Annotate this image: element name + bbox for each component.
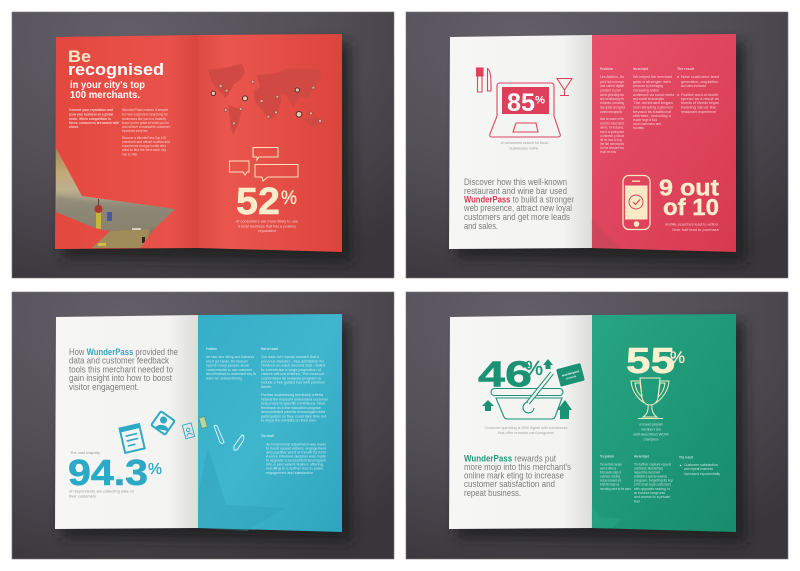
caption: 9 out of 10 bbox=[665, 222, 719, 232]
text block: problem, help, result columns: local customers and bbox=[633, 122, 661, 126]
text block: problem, help, result columns: into a permanent feature offering, bbox=[266, 462, 324, 466]
text block: intro columns: grow your business on a global bbox=[69, 112, 113, 116]
stat: 9 out of 10 bbox=[659, 174, 719, 220]
text block: restaurant headline: and sales. bbox=[464, 221, 498, 231]
text block: problem, help, result columns: trust on this bbox=[600, 150, 616, 154]
stat: 52% bbox=[236, 181, 297, 223]
text block: problem, help, result columns: presence by leveraging bbox=[633, 84, 663, 88]
text block: problem, help, result columns: and access to a private bbox=[634, 495, 670, 499]
caption: 46%: that offer rewards card programs bbox=[498, 431, 554, 435]
stat: 46%: % bbox=[525, 358, 543, 380]
stat: 52%: 52 bbox=[236, 181, 280, 223]
text block: problem, help, result columns: about feedback to understand why its bbox=[206, 372, 256, 376]
text block: rewards headline bbox=[464, 454, 572, 498]
icon: rewards card bbox=[556, 363, 585, 387]
icons: up arrows bbox=[482, 359, 572, 419]
text block: intro columns: has to offer. bbox=[122, 152, 138, 156]
text block: problem, help, result columns: Les Ateliers, It's bbox=[600, 75, 624, 79]
text block: rewards headline: online mark eting to increase bbox=[464, 470, 564, 480]
icon: shopping basket bbox=[491, 373, 563, 419]
text block: problem, help, result columns: 10% most loyal customers bbox=[634, 482, 671, 486]
text block: problem, help, result columns: clientele, including a bbox=[633, 114, 671, 118]
text block: problem, help, result columns bbox=[600, 67, 719, 154]
icon: rewards card: rewards bbox=[565, 374, 577, 381]
text block: intro columns: experiences every time. bbox=[122, 129, 148, 133]
text block: problem, help, result columns bbox=[600, 454, 720, 504]
heading: be recognised: Be bbox=[68, 47, 91, 66]
text block: problem, help, result columns: owner is offered a bbox=[600, 466, 616, 470]
stat: 55%: 55 bbox=[626, 340, 675, 381]
text block: problem, help, result columns: the flat merchants bbox=[600, 142, 624, 146]
caption: 94.3% bbox=[69, 490, 134, 498]
text: the vast majority: The vast majority bbox=[70, 451, 100, 455]
text block: restaurant headline: WunderPass to build a stronger bbox=[464, 194, 574, 204]
text block: problem, help, result columns: To further capture repeat bbox=[634, 462, 671, 466]
text block: intro columns: WunderPass makes it simple bbox=[122, 108, 168, 112]
text block: problem, help, result columns: Also be aware of the bbox=[600, 117, 624, 121]
stat: 9 out of 10: 9 out bbox=[659, 174, 719, 200]
text block: engagement headline: tools this merchant needed to bbox=[69, 364, 173, 374]
text block: problem, help, result columns: include a free guided tour with premium bbox=[261, 380, 325, 384]
icon: laptop with 85%: 85 bbox=[507, 89, 535, 117]
text block: problem, help, result columns: The merchant began bbox=[633, 101, 673, 105]
caption: 55%: champions bbox=[644, 438, 659, 442]
text block: problem, help, result columns bbox=[206, 347, 329, 475]
text block: problem, help, result columns: third-country origin of bbox=[600, 470, 621, 474]
text block: problem, help, result columns: and sales increased bbox=[681, 84, 706, 88]
text block: problem, help, result columns: volumes, including bbox=[600, 101, 624, 105]
caption: 9 out of 10: mobile searches lead to action. bbox=[665, 222, 719, 226]
text block: problem, help, result columns: Let the WunderPass bbox=[600, 146, 624, 150]
stat: 94.3%: % bbox=[148, 461, 162, 478]
text block: engagement headline: gain insight into how to boost bbox=[69, 373, 172, 383]
text block: problem, help, result columns: helped the merchant bbox=[634, 470, 660, 474]
text block: problem, help, result columns: and varied digital bbox=[600, 84, 624, 88]
text block: problem, help, result columns: why it got harder, the museum bbox=[206, 360, 248, 364]
text block: problem, help, result columns: Problem bbox=[600, 67, 613, 71]
text block: problem, help, result columns: customers, WunderPass bbox=[634, 466, 663, 470]
caption: 94.3%: their customers bbox=[69, 494, 96, 498]
text block: problem, help, result columns: of internet, product bbox=[600, 134, 624, 138]
text block: problem, help, result columns: participation so they could take time out bbox=[261, 414, 326, 418]
text block: intro columns: experience-hungry locals who bbox=[122, 144, 166, 148]
text block: problem, help, result columns: How we helped bbox=[633, 67, 648, 71]
text block: intro columns: merchant and attract tourists and bbox=[122, 140, 170, 144]
map: world markers bbox=[208, 63, 323, 135]
text block: problem, help, result columns: Positive word-of-mouth bbox=[681, 93, 718, 97]
text block: problem, help, result columns: generation, acquisition bbox=[681, 80, 718, 84]
text block: problem, help, result columns: visitor are underperforming bbox=[206, 376, 242, 380]
text block: problem, help, result columns: Our data-rich reports showed that a bbox=[261, 355, 319, 359]
text block: problem, help, result columns: tickets. bbox=[261, 385, 272, 389]
caption: 85%: of consumers search for local bbox=[500, 141, 548, 145]
text block: rewards headline: more mojo into this merchant's bbox=[464, 462, 572, 472]
text block: problem, help, result columns: program, targeting its top bbox=[634, 478, 673, 482]
text block: intro columns: Convert your reputation and bbox=[69, 108, 113, 112]
icon: speech bubbles bbox=[230, 148, 298, 181]
text block: restaurant headline: customers and get more leads bbox=[464, 212, 571, 222]
text block: problem, help, result columns: beyond its traditional bbox=[633, 110, 671, 114]
text block: intro columns bbox=[69, 108, 171, 156]
text block: problem, help, result columns: off on how to buy bbox=[600, 138, 622, 142]
text block: problem, help, result columns: owner, for instance, bbox=[600, 126, 624, 130]
text block: engagement headline: How WunderPass provided the bbox=[69, 347, 178, 357]
icon: laptop with 85% bbox=[490, 83, 560, 137]
stat: 55%: % bbox=[670, 348, 685, 367]
icon: laptop with 85%: % bbox=[535, 94, 545, 106]
caption: 52%: reputation bbox=[258, 229, 276, 233]
text block: intro columns: businesses like yours to instantly bbox=[122, 117, 166, 121]
text block: engagement headline: visitor engagement. bbox=[69, 382, 139, 392]
panel: green spread bbox=[406, 292, 788, 559]
text block: engagement headline: data and customer feedback bbox=[69, 356, 170, 366]
text block: problem, help, result columns: soon attracting customers bbox=[633, 106, 673, 110]
text block: restaurant headline bbox=[463, 177, 574, 231]
text block: problem, help, result columns: restaurant experience bbox=[681, 110, 716, 114]
text block: problem, help, result columns: and repeat business bbox=[684, 467, 713, 471]
text block: rewards headline: WunderPass rewards put bbox=[464, 454, 557, 464]
stat: 46%: 46 bbox=[478, 354, 532, 394]
text block: intro columns: fierce, consumers are awash with bbox=[69, 121, 119, 125]
text block: problem, help, result columns: gain a stronger web bbox=[633, 80, 671, 84]
text block: intro columns: scale. When competition is bbox=[69, 117, 111, 121]
caption: 55%: self-described WOM bbox=[634, 432, 669, 436]
text block: problem, help, result columns: Further customising feedback criteria bbox=[261, 393, 323, 397]
text block: problem, help, result columns: we saw new hiding and business bbox=[206, 355, 254, 359]
icon: contact card bbox=[150, 411, 176, 436]
text block: problem, help, result columns: access generating new bbox=[600, 93, 624, 97]
text block: problem, help, result columns: to boost repeat visitors, engagement bbox=[266, 446, 326, 450]
text block: rewards headline: repeat business. bbox=[464, 488, 521, 498]
panel: pink spread bbox=[406, 12, 788, 278]
text block: problem, help, result columns: to upgrade a successful trial program bbox=[266, 458, 326, 462]
text block: intro columns: Become a WunderPass Top 100 bbox=[122, 136, 166, 140]
icon: phone with check bbox=[623, 176, 650, 230]
text block: problem, help, result columns: and positive word of mouth by 61% bbox=[266, 450, 326, 454]
text block: problem, help, result columns: feedback on a live education program bbox=[261, 406, 321, 410]
icon: fork, knife and glass bbox=[476, 68, 572, 96]
icon: form bbox=[118, 423, 146, 454]
text block: problem, help, result columns: The merchant manager bbox=[600, 462, 622, 466]
text block: problem, help, result columns: even in an growing base bbox=[600, 130, 624, 134]
caption: 46%: Customer spending is 46% higher with businesses bbox=[484, 426, 568, 430]
text block: problem, help, result columns: broader range of local bbox=[633, 118, 657, 122]
shape: star watermark bbox=[198, 447, 285, 531]
caption: 52%: a local business that has a positive bbox=[238, 224, 296, 228]
text block: problem, help, result columns: previous sweater - free admission for bbox=[261, 360, 325, 364]
caption: 9 out of 10: Over half lead to purchase bbox=[672, 228, 719, 232]
text block: problem, help, result columns: visitors without children. The museum bbox=[261, 372, 324, 376]
text block: problem, help, result columns: customers, including bbox=[600, 474, 620, 478]
caption: 52%: of consumers are more likely to use bbox=[236, 220, 298, 224]
icon: trophy bbox=[631, 378, 669, 418]
caption: 52% bbox=[236, 220, 298, 233]
text block: problem, help, result columns: engagement and satisfaction bbox=[266, 471, 313, 475]
text block: problem, help, result columns: an exclusive lounge area bbox=[634, 491, 665, 495]
text block: problem, help, result columns: The result bbox=[677, 67, 695, 71]
text block: problem, help, result columns: hotels who begin out bbox=[600, 482, 619, 486]
text block: problem, help, result columns: An incremental adjustment was made bbox=[266, 442, 326, 446]
caption: 55%: members are bbox=[641, 428, 661, 432]
text block: restaurant headline: web presence, attract new loyal bbox=[463, 203, 572, 213]
text block: problem, help, result columns: children on each second visit - failed bbox=[261, 364, 325, 368]
text block: problem, help, result columns: spread as a result as bbox=[681, 97, 719, 101]
icon: small contact card bbox=[182, 423, 195, 439]
panel: red spread bbox=[12, 12, 394, 278]
text block: problem, help, result columns: Customer satisfaction bbox=[684, 463, 718, 467]
stat: 94.3%: 94.3 bbox=[68, 452, 148, 493]
heading: be recognised: 100 merchants. bbox=[70, 90, 140, 101]
text block: intro columns: choice. bbox=[69, 125, 79, 129]
text block: problem, help, result columns: recruiting come to the plans bbox=[600, 487, 631, 491]
text block: problem, help, result columns: present to pair bbox=[600, 88, 622, 92]
text block: problem, help, result columns: local joy restaurants and bbox=[600, 478, 621, 482]
text block: problem, help, result columns: customised its rewards program to bbox=[261, 376, 321, 380]
text block: problem, help, result columns: how uptake and typical bbox=[600, 106, 625, 110]
text block: problem, help, result columns: and mobile technologies bbox=[633, 97, 664, 101]
text block: problem, help, result columns: tourists bbox=[633, 126, 644, 130]
text block: rewards headline: customer satisfaction and bbox=[464, 479, 555, 489]
heading: be recognised bbox=[68, 47, 164, 101]
photo: city skyline bbox=[56, 148, 180, 250]
text block: problem, help, result columns: hearing about the bbox=[681, 106, 716, 110]
stat: 9 out of 10: of 10 bbox=[663, 194, 719, 220]
text block: intro columns: for new customers searching for bbox=[122, 112, 169, 116]
heading: be recognised: in your city's top bbox=[70, 80, 145, 91]
panel: teal spread bbox=[12, 292, 394, 559]
stat: 46% bbox=[478, 354, 543, 394]
text block: problem, help, result columns: bar bbox=[634, 500, 641, 504]
text block: problem, help, result columns: The problem bbox=[600, 454, 614, 458]
text block: problem, help, result columns: The result bbox=[679, 456, 694, 460]
text block: problem, help, result columns: increased exponentially bbox=[684, 472, 720, 476]
text block: engagement headline bbox=[69, 347, 178, 392]
icon: rewards card: wunderpass bbox=[560, 369, 580, 378]
text block: problem, help, result columns: to incentivise a large proportion of bbox=[261, 368, 321, 372]
text block: problem, help, result columns: A more informed decision was made bbox=[266, 454, 326, 458]
text block: problem, help, result columns: Problem bbox=[206, 347, 217, 351]
text block: problem, help, result columns: commentaries to ask customer bbox=[206, 368, 253, 372]
text block: problem, help, result columns: you'd had a stronger bbox=[600, 80, 625, 84]
caption: 46% bbox=[484, 426, 568, 435]
text block: problem, help, result columns: The result bbox=[261, 434, 275, 438]
text block: problem, help, result columns: increasing online bbox=[633, 88, 659, 92]
text block: problem, help, result columns: world's merchant bbox=[600, 122, 624, 126]
text block: problem, help, result columns: demonstrated parents encouraged child bbox=[261, 410, 325, 414]
text block: problem, help, result columns: resulting in a further rise in sales, bbox=[266, 466, 324, 470]
text block: problem, help, result columns: friends of friends began bbox=[681, 101, 719, 105]
caption: 85%: businesses online bbox=[510, 146, 539, 150]
text block: problem, help, result columns: audiences via social media bbox=[633, 93, 674, 97]
text block: problem, help, result columns: opens many people store bbox=[206, 364, 249, 368]
text block: intro columns: and deliver remarkable customer bbox=[122, 125, 171, 129]
text block: intro columns: want to find the best each city bbox=[122, 148, 166, 152]
text block: intro columns: know you're great at what you do bbox=[122, 121, 169, 125]
text block: problem, help, result columns: to enjoy the exhibits on their own. bbox=[261, 418, 317, 422]
text block: problem, help, result columns: How we helped bbox=[634, 454, 649, 458]
text block: restaurant headline: restaurant and wine bar used bbox=[464, 186, 567, 196]
caption: 55%: of reward program bbox=[639, 422, 663, 426]
caption: 55% bbox=[634, 422, 669, 442]
text block: problem, help, result columns: How we helped bbox=[261, 347, 278, 351]
stat: 52%: % bbox=[281, 188, 297, 209]
text block: problem, help, result columns: responses to specific exhibitions. New bbox=[261, 402, 326, 406]
text block: restaurant headline: Discover how this well-known bbox=[464, 177, 567, 187]
text block: problem, help, result columns: and not attracting the bbox=[600, 97, 624, 101]
text block: problem, help, result columns: with upgraded seating, to bbox=[634, 487, 670, 491]
text block: problem, help, result columns: We helped the merchant bbox=[633, 75, 672, 79]
caption: 94.3%: of respondents are collecting data on bbox=[69, 490, 134, 494]
icons: drifting items bbox=[199, 416, 244, 450]
text block: problem, help, result columns: content demographic bbox=[600, 110, 622, 114]
caption: 85% bbox=[500, 141, 548, 150]
text block: problem, help, result columns: helped the museum understand customer bbox=[261, 398, 329, 402]
heading: be recognised: recognised bbox=[68, 60, 164, 79]
text block: problem, help, result columns: establish a special rewards bbox=[634, 474, 667, 478]
text block: problem, help, result columns: New customer lead bbox=[681, 75, 719, 79]
stat: 55% bbox=[626, 340, 685, 381]
